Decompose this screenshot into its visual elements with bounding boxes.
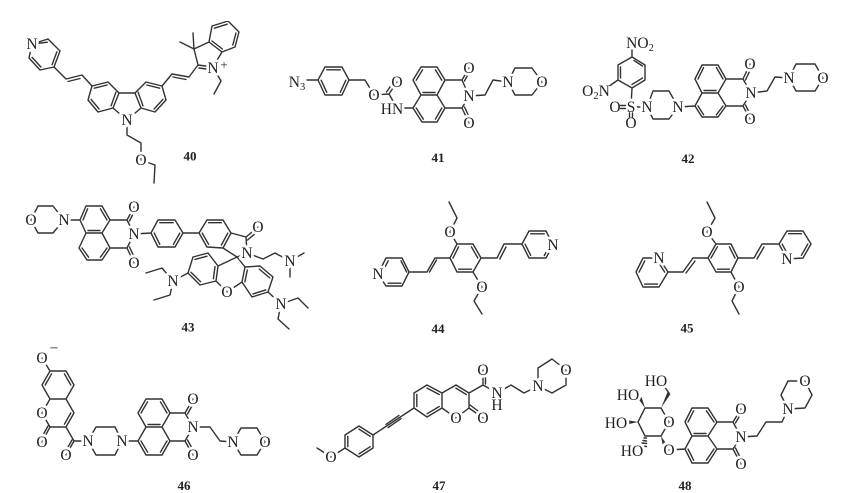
- atom labels 42: [582, 35, 829, 132]
- atom labels 43: O: [128, 199, 140, 216]
- compound number 41: 41: [432, 150, 444, 165]
- atom labels 42: 2: [649, 43, 654, 54]
- atom labels 41: 3: [300, 82, 305, 93]
- molecule 46: [36, 340, 271, 493]
- atom labels 45: O: [701, 224, 713, 241]
- bonds 48: [638, 381, 812, 464]
- atom labels 41: [289, 60, 548, 132]
- atom labels 46: [36, 340, 271, 464]
- atom labels 43: N: [275, 296, 287, 313]
- bonds 44: [378, 202, 553, 314]
- atom labels 41: N: [502, 74, 514, 91]
- atom labels 42: N: [783, 70, 795, 87]
- compound number 42: 42: [682, 151, 694, 166]
- atom labels 48: HO: [621, 443, 643, 460]
- atom labels 40: N: [207, 60, 219, 77]
- atom labels 43: N: [128, 226, 140, 243]
- atom labels 41: O: [368, 87, 380, 104]
- atom labels 48: HO: [617, 387, 639, 404]
- atom labels 48: O: [663, 442, 675, 459]
- atom labels 46: O: [259, 434, 271, 451]
- atom labels 46: O: [187, 447, 199, 464]
- atom labels 43: N: [284, 253, 296, 270]
- atom labels 42: O: [817, 70, 829, 87]
- atom labels 46: O: [187, 391, 199, 408]
- atom labels 42: N: [672, 99, 684, 116]
- atom labels 47: O: [477, 410, 489, 427]
- atom labels 42: O: [625, 115, 637, 132]
- atom labels 45: N: [781, 251, 793, 268]
- molecule 41: [289, 60, 548, 165]
- atom labels 47: O: [477, 362, 489, 379]
- atom labels 43: [25, 199, 296, 313]
- bonds 45: [636, 202, 811, 314]
- atom labels 48: O: [735, 401, 747, 418]
- bonds 42: [610, 50, 823, 119]
- atom labels 47: O: [450, 410, 462, 427]
- atom labels 43: O: [25, 212, 37, 229]
- atom labels 48: N: [782, 401, 794, 418]
- compound number 40: 40: [184, 148, 196, 164]
- atom labels 46: N: [116, 433, 128, 450]
- atom labels 46: N: [82, 433, 94, 450]
- bonds 41: [307, 67, 542, 123]
- atom labels 48: HO: [645, 373, 667, 390]
- atom labels 48: O: [663, 414, 675, 431]
- atom labels 46: O: [36, 350, 48, 367]
- atom labels 41: O: [391, 74, 403, 91]
- atom labels 40: N: [26, 36, 38, 53]
- atom labels 45: [653, 224, 793, 296]
- compound number 44: 44: [432, 321, 445, 336]
- atom labels 43: O: [128, 255, 140, 272]
- atom labels 46: O: [36, 405, 48, 422]
- atom labels 47: N: [491, 385, 503, 402]
- atom labels 46: O: [36, 434, 48, 451]
- compound number 43: 43: [182, 320, 195, 334]
- atom labels 47: O: [560, 362, 572, 379]
- bonds 47: [317, 359, 566, 457]
- atom labels 40: N: [121, 112, 133, 129]
- atom labels 48: N: [735, 429, 747, 446]
- atom labels 42: N: [641, 99, 653, 116]
- atom labels 42: N: [599, 83, 610, 100]
- atom labels 41: O: [463, 115, 475, 132]
- compound number 47: 47: [432, 478, 446, 493]
- molecule 40: [26, 21, 239, 183]
- atom labels 48: HO: [605, 415, 627, 432]
- molecule 43: [25, 199, 308, 334]
- atom labels 42: O: [744, 111, 756, 128]
- atom labels 46: N: [227, 434, 239, 451]
- wedge and hash bonds 48: [627, 392, 670, 447]
- atom labels 44: [372, 224, 559, 296]
- molecule 44: [372, 202, 559, 336]
- atom labels 46: O: [60, 447, 72, 464]
- atom labels 42: NO: [626, 35, 649, 52]
- atom labels 42: O: [744, 56, 756, 73]
- atom labels 41: O: [463, 60, 475, 77]
- atom labels 47: O: [325, 449, 337, 466]
- atom labels 40: [26, 36, 228, 169]
- atom labels 43: O: [221, 284, 233, 301]
- atom labels 41: HN: [381, 101, 403, 118]
- atom labels 40: O: [135, 152, 147, 169]
- atom labels 41: O: [536, 74, 548, 91]
- atom labels 44: N: [372, 266, 384, 283]
- sulfonyl double bonds 42: [620, 106, 632, 118]
- atom labels 47: [325, 362, 572, 466]
- atom labels 42: N: [745, 85, 757, 102]
- atom labels 41: N: [463, 88, 475, 105]
- molecule 48: [605, 373, 812, 493]
- atom labels 45: O: [733, 279, 745, 296]
- atom labels 46: N: [187, 419, 199, 436]
- atom labels 48: O: [799, 373, 811, 390]
- bonds 40: [29, 21, 239, 183]
- atom labels 47: H: [491, 397, 503, 414]
- molecule 42: [582, 35, 829, 166]
- atom labels 42: S: [627, 99, 635, 116]
- atom labels 48: [605, 373, 811, 473]
- molecule 45: [636, 202, 811, 336]
- molecule 47: [317, 359, 572, 493]
- atom labels 42: O: [582, 83, 593, 100]
- atom labels 43: N: [58, 212, 70, 229]
- atom labels 42: 2: [593, 91, 599, 102]
- atom labels 45: N: [653, 250, 665, 267]
- atom labels 43: O: [252, 219, 264, 236]
- atom labels 44: O: [444, 224, 456, 241]
- atom labels 40: +: [220, 57, 228, 72]
- atom labels 43: N: [167, 273, 179, 290]
- atom labels 47: N: [532, 378, 544, 395]
- compound number 45: 45: [680, 320, 694, 336]
- atom labels 43: N: [241, 245, 253, 262]
- compound number 48: 48: [678, 478, 692, 493]
- atom labels 46: −: [50, 340, 58, 357]
- atom labels 42: O: [609, 99, 621, 116]
- atom labels 44: N: [547, 237, 559, 254]
- bonds 43: [31, 206, 308, 329]
- bonds 46: [40, 358, 265, 455]
- atom labels 44: O: [476, 279, 488, 296]
- compound number 46: 46: [178, 478, 191, 493]
- atom labels 48: O: [735, 456, 747, 473]
- atom labels 41: N: [289, 74, 300, 91]
